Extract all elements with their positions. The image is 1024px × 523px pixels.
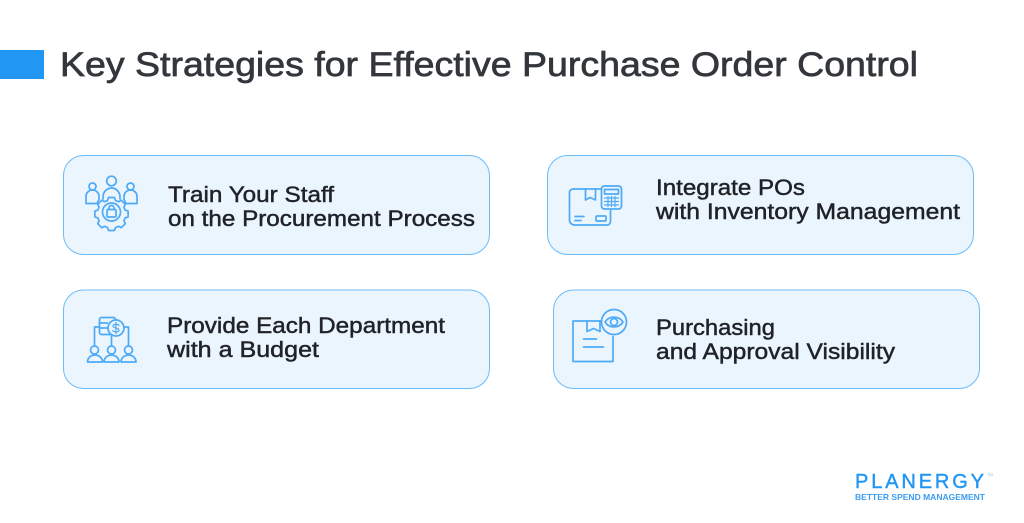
icon: parcel with eye xyxy=(573,310,626,362)
label: integrate POs: with Inventory Management xyxy=(655,199,960,224)
logo: Planergy: TM xyxy=(987,472,993,477)
label: integrate POs: Integrate POs xyxy=(656,175,805,200)
label: train your staff xyxy=(168,182,475,231)
label: purchasing visibility xyxy=(656,315,895,364)
label: purchasing visibility: Purchasing xyxy=(656,315,775,340)
logo: Planergy xyxy=(855,471,993,502)
panel: purchasing visibility xyxy=(554,290,980,388)
label: department budget: Provide Each Department xyxy=(167,313,445,338)
label: train your staff: Train Your Staff xyxy=(168,182,335,207)
label: department budget xyxy=(166,313,445,362)
panel: department budget xyxy=(64,290,490,388)
panel: train your staff xyxy=(64,156,490,254)
logo: Planergy: PLANERGY xyxy=(855,471,984,493)
label: purchasing visibility: and Approval Visibility xyxy=(656,339,895,364)
icon: budget shared between three people xyxy=(88,318,136,362)
icon: parcel with calculator xyxy=(570,186,622,225)
title: Key Strategies for Effective Purchase Order Control xyxy=(60,46,918,84)
panel: integrate POs xyxy=(548,156,974,254)
logo: Planergy: BETTER SPEND MANAGEMENT xyxy=(855,492,986,502)
title accent bar xyxy=(0,50,44,79)
label: train your staff: on the Procurement Process xyxy=(168,206,475,231)
label: integrate POs xyxy=(655,175,960,224)
icon: team with gear and lock xyxy=(86,176,137,231)
label: department budget: with a Budget xyxy=(166,337,319,362)
